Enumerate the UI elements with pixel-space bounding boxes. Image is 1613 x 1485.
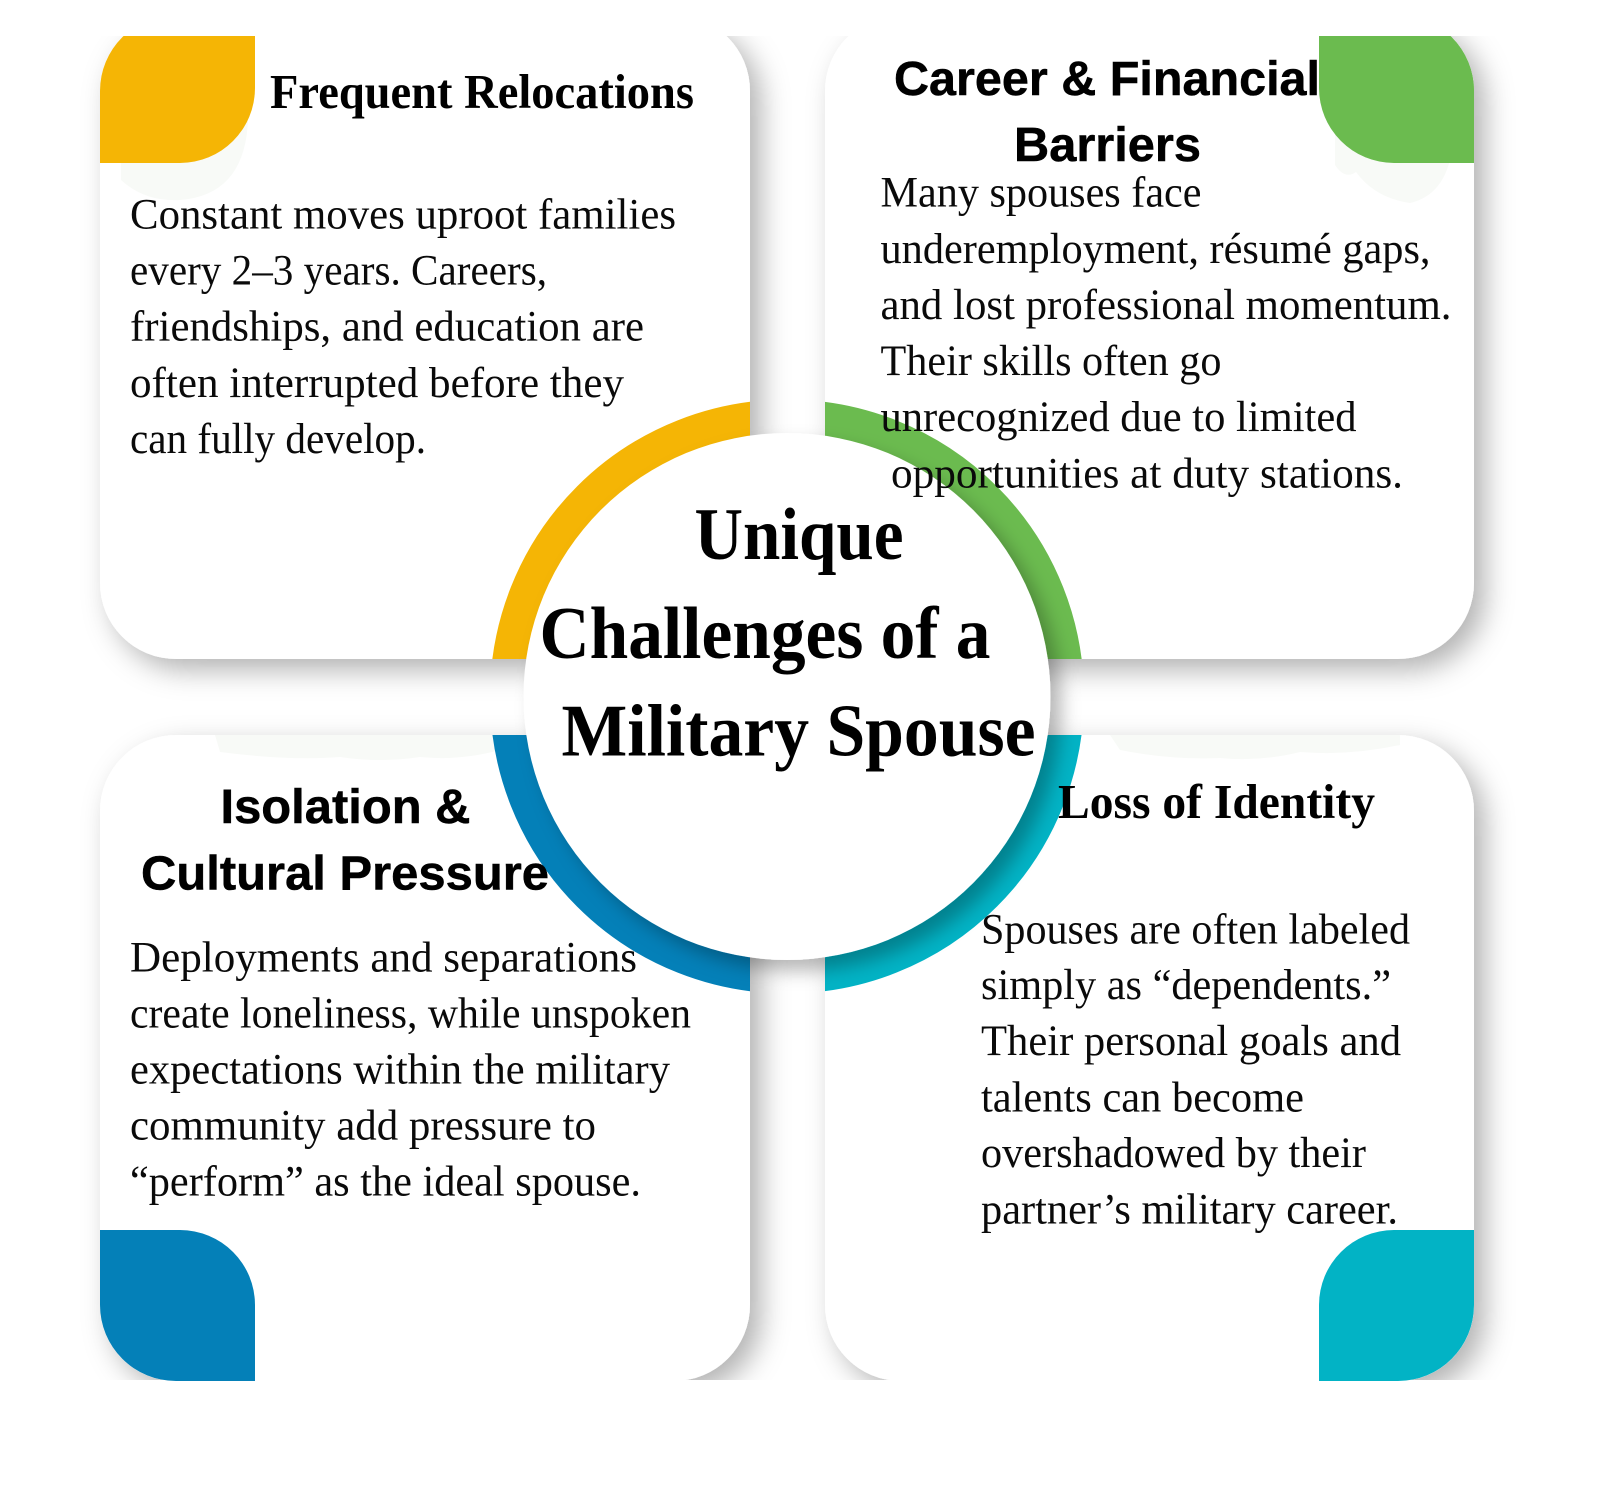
text block: Loss of Identity: simply as “dependents.” <box>981 961 1391 1009</box>
corner accent: blue <box>100 1230 255 1381</box>
text block: Career and Financial Barriers: opportunities at duty stations. <box>891 450 1403 498</box>
text block: Isolation and Cultural Pressure: Deployments and separations <box>130 934 637 982</box>
ring segment: yellow <box>492 402 750 659</box>
heading: Career and Financial Barriers: Barriers <box>1014 119 1201 172</box>
text block: Loss of Identity: partner’s military career. <box>981 1186 1398 1234</box>
text block: Loss of Identity: talents can become <box>981 1074 1304 1122</box>
text block: Career and Financial Barriers: and lost professional momentum. <box>880 281 1452 329</box>
heading: Isolation and Cultural Pressure <box>141 781 549 900</box>
heading: Frequent Relocations: Frequent Relocations <box>270 64 694 119</box>
heading: Isolation and Cultural Pressure: Isolation & <box>220 781 470 834</box>
ring segment: green <box>825 402 1082 659</box>
text block: Career and Financial Barriers: unrecognized due to limited <box>880 393 1357 441</box>
heading: Career and Financial Barriers: Career & Financial <box>894 53 1320 106</box>
ring segment: blue <box>492 735 750 992</box>
text block: Frequent Relocations <box>130 190 676 463</box>
center title: Unique <box>694 494 904 576</box>
text block: Isolation and Cultural Pressure: create loneliness, while unspoken <box>130 990 691 1038</box>
text block: Isolation and Cultural Pressure <box>130 934 691 1206</box>
heading: Career and Financial Barriers <box>894 53 1320 172</box>
center title: Challenges of a <box>540 593 990 675</box>
text block: Career and Financial Barriers: Their skills often go <box>880 337 1222 385</box>
heading: Isolation and Cultural Pressure: Cultural Pressure <box>141 848 549 900</box>
text block: Career and Financial Barriers <box>880 168 1452 498</box>
center title <box>540 494 1036 772</box>
panel: card backgrounds <box>100 15 1474 1381</box>
green accent overlap over heading edge <box>1450 36 1474 90</box>
text block: Loss of Identity: Their personal goals and <box>981 1017 1401 1065</box>
text block: Isolation and Cultural Pressure: expectations within the military <box>130 1046 670 1094</box>
corner accent: teal <box>1319 1230 1474 1381</box>
center title: Military Spouse <box>562 690 1036 772</box>
text block: Loss of Identity <box>981 906 1410 1234</box>
heading: Loss of Identity: Loss of Identity <box>1058 774 1375 829</box>
text block: Frequent Relocations: can fully develop. <box>130 415 426 463</box>
corner accent: yellow <box>100 36 255 163</box>
text block: Frequent Relocations: often interrupted before they <box>130 359 624 407</box>
text block: Frequent Relocations: Constant moves uproot families <box>130 190 676 238</box>
text block: Frequent Relocations: every 2–3 years. Careers, <box>130 246 547 294</box>
text block: Isolation and Cultural Pressure: “perform” as the ideal spouse. <box>130 1158 641 1206</box>
center white circle <box>524 433 1050 960</box>
text block: Loss of Identity: overshadowed by their <box>981 1129 1366 1177</box>
text block: Career and Financial Barriers: underemployment, résumé gaps, <box>880 225 1430 273</box>
corner accent: green <box>1319 36 1474 163</box>
text block: Career and Financial Barriers: Many spouses face <box>880 168 1202 216</box>
text block: Loss of Identity: Spouses are often labeled <box>981 906 1410 954</box>
text block: Frequent Relocations: friendships, and education are <box>130 302 644 350</box>
text block: Isolation and Cultural Pressure: community add pressure to <box>130 1102 596 1150</box>
ring segment: teal <box>825 735 1082 992</box>
